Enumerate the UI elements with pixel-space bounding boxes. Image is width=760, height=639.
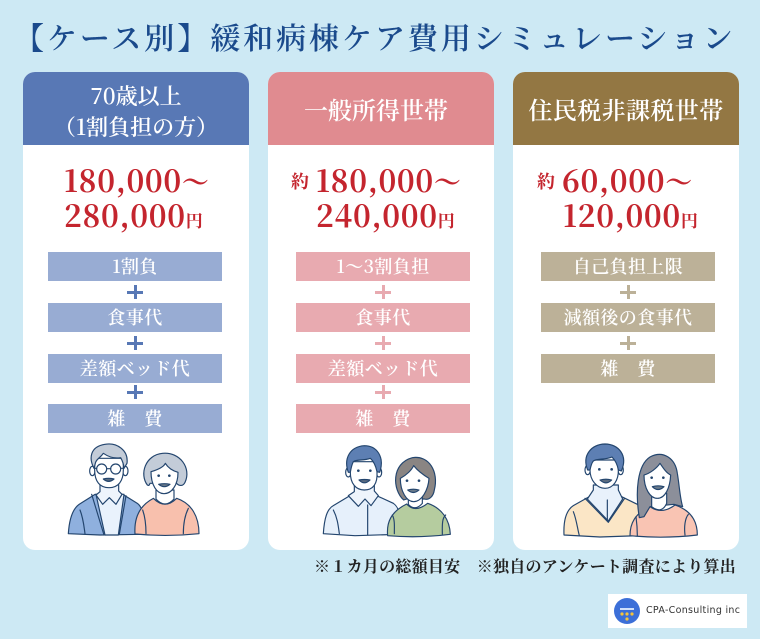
cost item: 1〜3割負担 <box>336 253 430 279</box>
cost item: 1割負 <box>112 253 158 279</box>
title: 【ケース別】緩和病棟ケア費用シミュレーション <box>14 14 736 58</box>
panel heading: （1割負担の方） <box>54 111 218 142</box>
plus <box>620 336 636 350</box>
cost item: 食事代 <box>355 304 411 330</box>
price: 住民税非課税世帯 line 1: 60,000〜 <box>562 157 692 201</box>
plus <box>127 285 143 299</box>
panel heading: 住民税非課税世帯 <box>528 91 724 126</box>
cost item <box>296 252 470 281</box>
panel heading <box>23 72 249 145</box>
cost item <box>541 354 715 383</box>
unit: 約: 約 <box>537 168 555 194</box>
panel heading: 一般所得世帯 <box>304 91 448 126</box>
panel heading: 70歳以上 <box>90 80 182 111</box>
plus <box>375 385 391 399</box>
cost item: 雑 費 <box>600 355 656 381</box>
panel: 一般所得世帯 <box>268 72 494 550</box>
price: 70歳以上 line 1: 180,000〜 <box>64 157 209 201</box>
cost item <box>541 252 715 281</box>
cost item: 雑 費 <box>107 405 163 431</box>
icon: badge <box>614 598 640 624</box>
footnote: ※１カ月の総額目安 ※独自のアンケート調査により算出 <box>314 554 736 577</box>
cost item: 食事代 <box>107 304 163 330</box>
cost item <box>296 354 470 383</box>
cost item: 減額後の食事代 <box>564 304 692 330</box>
plus <box>620 285 636 299</box>
cost item <box>48 354 222 383</box>
plus <box>127 385 143 399</box>
cost item: 差額ベッド代 <box>80 355 190 381</box>
cost item <box>48 303 222 332</box>
plus <box>375 285 391 299</box>
logo text: CPA-Consulting inc <box>646 605 740 616</box>
icon: couple <box>563 443 698 538</box>
cost item: 雑 費 <box>355 405 411 431</box>
cost item: 差額ベッド代 <box>328 355 438 381</box>
icon: middle-aged couple <box>322 445 451 538</box>
price: 一般所得世帯 line 1: 180,000〜 <box>316 157 461 201</box>
price: 住民税非課税世帯 line 2: 120,000円 <box>563 192 698 236</box>
cost item <box>296 404 470 433</box>
price: 70歳以上 line 2: 280,000円 <box>64 192 203 236</box>
unit: 約: 約 <box>291 168 309 194</box>
cost item: 自己負担上限 <box>573 253 683 279</box>
plus <box>127 336 143 350</box>
panel: 住民税非課税世帯 <box>513 72 739 550</box>
cost item <box>48 404 222 433</box>
logo: CPA-Consulting inc <box>608 594 747 628</box>
cost item <box>541 303 715 332</box>
panel: 70歳以上 <box>23 72 249 550</box>
cost item <box>48 252 222 281</box>
icon: elderly couple <box>68 443 200 536</box>
cost item <box>296 303 470 332</box>
plus <box>375 336 391 350</box>
panel heading <box>268 72 494 145</box>
panel heading <box>513 72 739 145</box>
price: 一般所得世帯 line 2: 240,000円 <box>316 192 455 236</box>
